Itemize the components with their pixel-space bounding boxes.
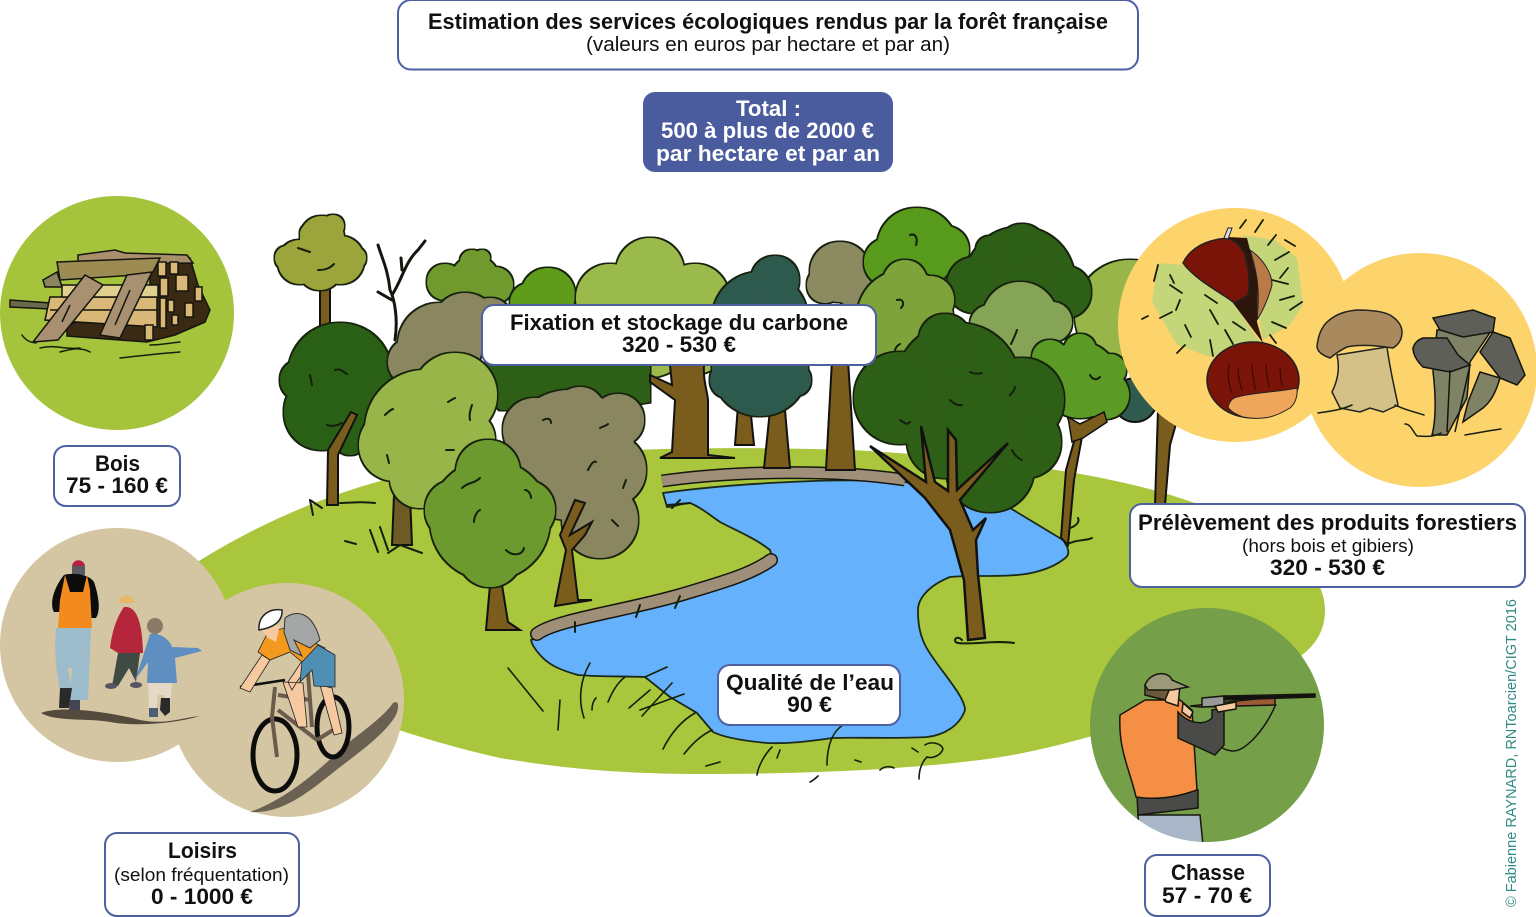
- tree: green right side: [1032, 334, 1129, 545]
- total box: 500 à plus de 2000 €: [661, 118, 874, 143]
- label: chasse: [1145, 855, 1270, 916]
- circle: timber pile: [0, 196, 234, 430]
- tree: light green behind label: [576, 238, 729, 377]
- credit: © Fabienne RAYNARD, RNToarcien/CIGT 2016: [1503, 599, 1520, 907]
- tree trunk: oak: [650, 365, 735, 458]
- grass tufts: [508, 663, 943, 782]
- label: produits forestiers: 320 - 530 €: [1270, 555, 1385, 580]
- lake: [531, 473, 1068, 743]
- tree: light green behind chestnut circle: [1075, 260, 1185, 505]
- tree: green foreground left: [425, 440, 555, 630]
- icon: chestnut: [1207, 342, 1299, 418]
- icon: cep mushroom: [1317, 310, 1424, 415]
- icon: black trumpet mushrooms: [1405, 310, 1525, 436]
- bush: back olive: [427, 250, 513, 304]
- bare dead tree: [378, 241, 425, 340]
- tree: grey olive centre: [503, 387, 646, 606]
- label: produits forestiers: [1130, 504, 1525, 587]
- icon: hikers family: [41, 560, 202, 724]
- label: bois: Bois: [95, 451, 140, 476]
- total box: [643, 92, 893, 172]
- label: bois: 75 - 160 €: [66, 473, 168, 498]
- label: produits forestiers: (hors bois et gibiers): [1242, 536, 1414, 556]
- tree: bright green crown: [864, 208, 969, 288]
- circle: hikers: [0, 528, 234, 762]
- circle: cyclist: [170, 583, 404, 817]
- tree: small olive: [275, 215, 366, 343]
- label: loisirs: 0 - 1000 €: [151, 884, 253, 909]
- title box: Estimation des services écologiques rendus par la forêt française: [428, 9, 1108, 34]
- label: carbone: 320 - 530 €: [622, 332, 736, 357]
- tree: dark green crown: [947, 224, 1091, 337]
- label: eau: 90 €: [787, 692, 832, 717]
- label: carbone: Fixation et stockage du carbone: [510, 310, 848, 335]
- tree: light green left: [345, 353, 497, 553]
- icon: stacked firewood: [10, 250, 210, 342]
- lake bank: north: [662, 473, 905, 481]
- forest: [275, 208, 1185, 643]
- label: produits forestiers: Prélèvement des produits forestiers: [1138, 510, 1517, 535]
- ground streak: [250, 702, 398, 812]
- tree: grey olive upper left: [388, 293, 512, 387]
- tree: pale grey green crown: [970, 282, 1072, 358]
- tree: grey olive right of teal: [807, 242, 877, 470]
- tree: dark green behind label: [485, 340, 650, 410]
- label: chasse: Chasse: [1171, 860, 1245, 885]
- title box: (valeurs en euros par hectare et par an): [586, 34, 950, 56]
- label: bois: [54, 446, 180, 506]
- tree: dark green left: [280, 323, 392, 515]
- label: chasse: 57 - 70 €: [1162, 883, 1252, 908]
- label: loisirs: (selon fréquentation): [114, 865, 289, 885]
- label: eau: [718, 665, 900, 725]
- circle: chestnuts: [1118, 208, 1536, 487]
- icon: chestnut burr: [1142, 220, 1303, 357]
- label: eau: Qualité de l’eau: [726, 670, 894, 695]
- icon: hunter with rifle: [1120, 674, 1315, 845]
- circle: hunter: [1090, 608, 1324, 845]
- waterside grass: [575, 500, 690, 632]
- label: carbone: [482, 305, 876, 365]
- label: loisirs: [105, 833, 299, 916]
- icon: cyclist: [240, 610, 349, 791]
- tree: mid green crown: [855, 260, 954, 370]
- tree: teal: [710, 256, 811, 468]
- lake bank: south: [537, 560, 771, 634]
- title box: [398, 0, 1138, 70]
- tree: large dark foreground: [854, 314, 1064, 643]
- label: loisirs: Loisirs: [168, 838, 237, 863]
- total box: Total :: [736, 96, 801, 121]
- meadow ground: [170, 448, 1325, 774]
- total box: par hectare et par an: [656, 141, 880, 166]
- foliage scribbles: [298, 235, 1100, 554]
- bush: back green: [510, 268, 575, 323]
